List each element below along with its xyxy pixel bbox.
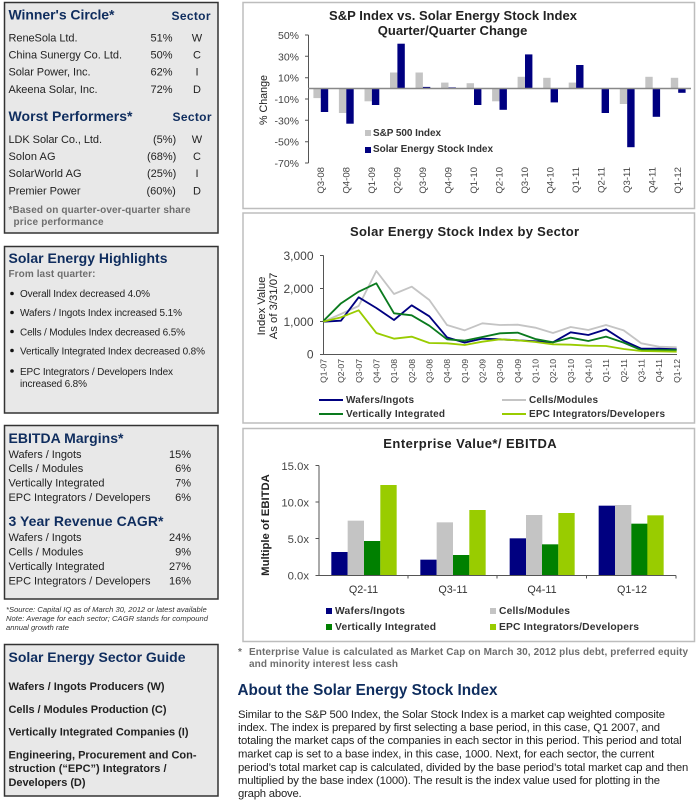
heading: sector guide: Solar Energy Sector Guide (8, 649, 186, 665)
legend (365, 128, 493, 155)
margins table: EPC Integrators / Developers (8, 492, 151, 504)
source note (6, 605, 209, 632)
line: vertically integrated (323, 283, 677, 350)
x axis labels: Q1-12 (617, 584, 647, 596)
x axis labels (316, 167, 684, 194)
bullet list: Overall Index decreased 4.0% (20, 289, 150, 300)
x axis labels: Q1-08 (389, 359, 399, 383)
x axis labels: Q1-10 (530, 359, 540, 383)
x axis labels: Q3-09 (418, 167, 429, 194)
legend: Solar Energy Stock Index (373, 144, 493, 155)
chart title: Solar Energy Stock Index by Sector (350, 224, 579, 239)
chart title (329, 8, 578, 38)
y axis ticks (283, 249, 314, 362)
worst performers table: LDK Solar Co., Ltd. (8, 134, 102, 146)
panel: S&P vs solar bar chart (243, 2, 694, 208)
winners table: 51% (150, 32, 173, 44)
y axis ticks: 15.0x (281, 461, 309, 473)
margins table: Cells / Modules (8, 463, 84, 475)
panel: winners and worst performers (4, 2, 218, 233)
x axis labels: Q4-10 (546, 167, 556, 194)
footnote: basis of performance (8, 205, 191, 228)
x axis labels: Q3-08 (316, 167, 327, 194)
worst performers table: (25%) (147, 168, 176, 180)
chart title: Enterprise Value*/ EBITDA (383, 436, 557, 451)
bars: cells/modules (348, 505, 631, 575)
y axis ticks: 3,000 (283, 249, 314, 263)
y axis label (256, 273, 280, 339)
margins table (8, 449, 191, 504)
heading: highlights: Solar Energy Highlights (8, 250, 168, 266)
y axis label: As of 3/31/07 (268, 273, 280, 339)
legend: Vertically Integrated (335, 622, 436, 633)
panel: sector guide (4, 644, 218, 796)
worst performers table: (68%) (147, 151, 176, 163)
winners table: W (192, 32, 203, 44)
x axis labels: Q2-09 (392, 167, 404, 194)
x axis labels: Q1-12 (673, 167, 684, 194)
footnote: enterprise value: * (238, 647, 242, 658)
clustered bars (331, 485, 664, 575)
text block: index methodology: index. The index is prepared by first selecting a base period, in this case, Q1 2007, and (238, 722, 660, 734)
x axis labels: Q4-09 (513, 359, 523, 383)
winners table: 62% (150, 66, 173, 78)
x axis labels: Q2-11 (349, 584, 378, 596)
x axis labels: Q3-09 (495, 359, 505, 383)
bullet list (10, 289, 205, 390)
legend: EPC Integrators/Developers (529, 409, 665, 420)
chart title: Quarter/Quarter Change (378, 23, 527, 38)
source note: *Source: Capital IQ as of March 30, 2012 or latest available (6, 605, 207, 614)
x axis labels (349, 584, 647, 596)
x axis labels: Q2-10 (548, 359, 558, 383)
winners table: C (193, 50, 201, 62)
CAGR table: Wafers / Ingots (8, 532, 82, 544)
worst performers table (8, 134, 203, 198)
line series (323, 271, 677, 352)
y axis ticks: 1,000 (283, 315, 314, 329)
legend: Cells/Modules (529, 395, 598, 406)
axes (320, 256, 677, 354)
sector list: Wafers / Ingots Producers (W) (8, 681, 165, 693)
heading: Worst Performers: Worst Performers* (8, 108, 133, 124)
y axis ticks: -30% (274, 116, 299, 128)
sector list: Vertically Integrated Companies (I) (8, 726, 189, 738)
sector list: Engineering, Procurement and Con- (8, 750, 197, 762)
bars: vertically integrated (364, 524, 648, 575)
winners table: Akeena Solar, Inc. (8, 84, 98, 96)
heading: Winner's Circle: Winner's Circle* (8, 6, 115, 22)
footnote: enterprise value: Enterprise Value is calculated as Market Cap on March 30, 2012 plus debt, preferred equity (249, 647, 688, 658)
worst performers table: I (195, 168, 199, 180)
y axis label: Index Value (256, 277, 268, 335)
x axis labels: Q1-12 (672, 359, 682, 383)
margins table: Vertically Integrated (8, 478, 104, 490)
subheading: From last quarter: (8, 269, 96, 280)
legend: Wafers/Ingots (346, 395, 414, 406)
text block: index methodology (238, 709, 688, 800)
y axis ticks (274, 30, 299, 170)
CAGR table: 16% (169, 576, 191, 588)
worst performers table: (60%) (146, 186, 176, 198)
x axis labels: Q4-09 (444, 167, 454, 194)
footnote: basis of performance: *Based on quarter-over-quarter share (8, 205, 191, 216)
source note: annual growth rate (6, 623, 69, 632)
x axis labels: Q3-08 (424, 359, 434, 383)
y axis ticks: -10% (274, 94, 299, 106)
winners table: Solar Power, Inc. (8, 66, 90, 78)
x axis labels: Q1-09 (367, 167, 378, 194)
axes (305, 35, 691, 163)
winners table (8, 32, 203, 96)
worst performers table: C (193, 151, 201, 163)
margins table: 6% (175, 492, 191, 504)
text block: index methodology: graph above. (238, 788, 302, 800)
x axis labels (318, 359, 682, 383)
y axis ticks: 5.0x (288, 534, 309, 546)
x axis labels: Q4-11 (654, 359, 664, 382)
x axis labels: Q3-11 (636, 359, 646, 382)
heading: EBITDA Margins: EBITDA Margins* (8, 430, 124, 446)
y axis ticks: 10% (278, 72, 299, 84)
margins table: 15% (169, 449, 191, 461)
x axis labels: Q4-11 (648, 167, 658, 193)
legend: EPC Integrators/Developers (499, 622, 639, 633)
y axis ticks: 0 (307, 348, 314, 362)
x axis labels: Q2-11 (619, 359, 629, 382)
worst performers table: (5%) (153, 134, 176, 146)
y axis label: % Change (258, 75, 270, 125)
panel: EV / EBITDA bar chart (243, 428, 694, 642)
y axis label: Multiple of EBITDA (260, 474, 272, 576)
text block: index methodology: Similar to the S&P 500 Index, the Solar Stock Index is a market cap weighted composite (238, 709, 665, 721)
x axis labels: Q3-11 (438, 584, 468, 596)
panel: solar energy highlights (4, 246, 218, 413)
line: cells/modules (323, 271, 677, 347)
x axis labels: Q2-08 (407, 359, 417, 383)
y axis ticks (281, 461, 309, 582)
bullet list: Vertically Integrated Index decreased 0.8% (20, 346, 205, 358)
winners table: 72% (150, 84, 173, 96)
heading: sector column: Sector (172, 9, 211, 23)
bullet list: Cells / Modules Index decreased 6.5% (20, 328, 185, 338)
legend: Vertically Integrated (346, 409, 445, 420)
worst performers table: Solon AG (8, 151, 56, 163)
bars: EPC integrators (380, 485, 664, 575)
heading: sector column: Sector (172, 110, 212, 124)
bars: wafers/ingots (331, 506, 615, 575)
text block: index methodology: market cap is set to a base index, in this case, 1000. Next, for each sector, the current (238, 748, 655, 760)
bullet list: Wafers / Ingots Index increased 5.1% (20, 308, 182, 319)
legend: S&P 500 Index (373, 128, 441, 139)
x axis labels: Q4-08 (442, 359, 452, 383)
winners table: 50% (150, 50, 173, 62)
x axis labels: Q3-07 (354, 359, 364, 383)
worst performers table: Premier Power (8, 186, 81, 198)
x axis labels: Q4-11 (527, 584, 557, 596)
x axis labels: Q2-09 (478, 359, 488, 383)
panel: margins and CAGR (4, 426, 218, 599)
CAGR table: EPC Integrators / Developers (8, 576, 151, 588)
text block: index methodology: period’s total market cap is calculated, divided by the base period’s total market cap and then (238, 762, 688, 774)
winners table: ReneSola Ltd. (8, 32, 78, 44)
sector list: struction (“EPC”) Integrators / (8, 763, 166, 775)
footnote: basis of performance: price performance (14, 217, 104, 228)
y axis ticks: 50% (278, 30, 299, 42)
winners table: D (193, 84, 201, 96)
CAGR table: 9% (175, 546, 191, 558)
CAGR table: Vertically Integrated (8, 561, 104, 573)
winners table: I (195, 66, 199, 78)
heading: revenue CAGR: 3 Year Revenue CAGR* (8, 513, 164, 529)
footnote: enterprise value: and minority interest less cash (249, 659, 398, 670)
x axis labels: Q2-07 (336, 359, 346, 383)
bullet list: increased 6.8% (20, 379, 87, 390)
x axis labels: Q1-09 (460, 359, 470, 383)
panel: sector line chart (243, 213, 694, 423)
x axis labels: Q1-10 (469, 167, 480, 194)
y axis ticks: -70% (274, 158, 299, 170)
chart title: S&P Index vs. Solar Energy Stock Index (329, 8, 578, 23)
worst performers table: W (192, 134, 203, 146)
S&P 500 bars (313, 72, 678, 113)
worst performers table: SolarWorld AG (8, 168, 82, 180)
x axis labels: Q1-07 (318, 359, 328, 383)
y axis ticks: 0.0x (288, 570, 309, 582)
y axis ticks: 10.0x (281, 498, 309, 510)
CAGR table: Cells / Modules (8, 546, 84, 558)
footnote: enterprise value (238, 647, 688, 670)
x axis labels: Q3-11 (622, 167, 633, 193)
CAGR table: 27% (169, 561, 191, 573)
x axis labels: Q4-08 (342, 167, 352, 194)
sector list: Developers (D) (8, 777, 86, 789)
text block: index methodology: totaling the market caps of the companies in each sector in this period. This period and total (238, 735, 682, 747)
x axis labels: Q2-11 (596, 167, 608, 193)
x axis labels: Q1-11 (571, 167, 582, 193)
CAGR table: 24% (169, 532, 191, 544)
axes (316, 466, 676, 578)
sector list (8, 681, 197, 789)
text block: index methodology: multiplied by the base index (1000). The result is the index value used for plotting in the (238, 775, 660, 787)
y axis ticks: -50% (274, 136, 299, 148)
margins table: 7% (175, 478, 191, 490)
x axis labels: Q3-10 (520, 167, 531, 194)
winners table: China Sunergy Co. Ltd. (8, 50, 122, 62)
x axis labels: Q2-10 (494, 167, 506, 194)
CAGR table (8, 532, 191, 588)
source note: Note: Average for each sector; CAGR stands for compound (6, 614, 209, 623)
line: EPC integrators (323, 310, 677, 352)
margins table: 6% (175, 463, 191, 475)
legend: Wafers/Ingots (335, 606, 405, 617)
legend: Cells/Modules (499, 606, 570, 617)
bullet list: EPC Integrators / Developers Index (20, 367, 173, 378)
line: wafers/ingots (323, 297, 677, 349)
y axis ticks: 2,000 (283, 282, 314, 296)
margins table: Wafers / Ingots (8, 449, 82, 461)
x axis labels: Q3-10 (566, 359, 576, 383)
x axis labels: Q4-07 (372, 359, 382, 383)
x axis labels: Q1-11 (601, 359, 611, 382)
worst performers table: D (193, 186, 201, 198)
y axis ticks: 30% (278, 52, 299, 64)
legend (326, 606, 639, 633)
solar index bars (321, 44, 686, 147)
legend (319, 395, 665, 420)
sector list: Cells / Modules Production (C) (8, 704, 167, 716)
x axis labels: Q4-10 (584, 359, 594, 383)
heading: about the index: About the Solar Energy Stock Index (238, 682, 498, 699)
